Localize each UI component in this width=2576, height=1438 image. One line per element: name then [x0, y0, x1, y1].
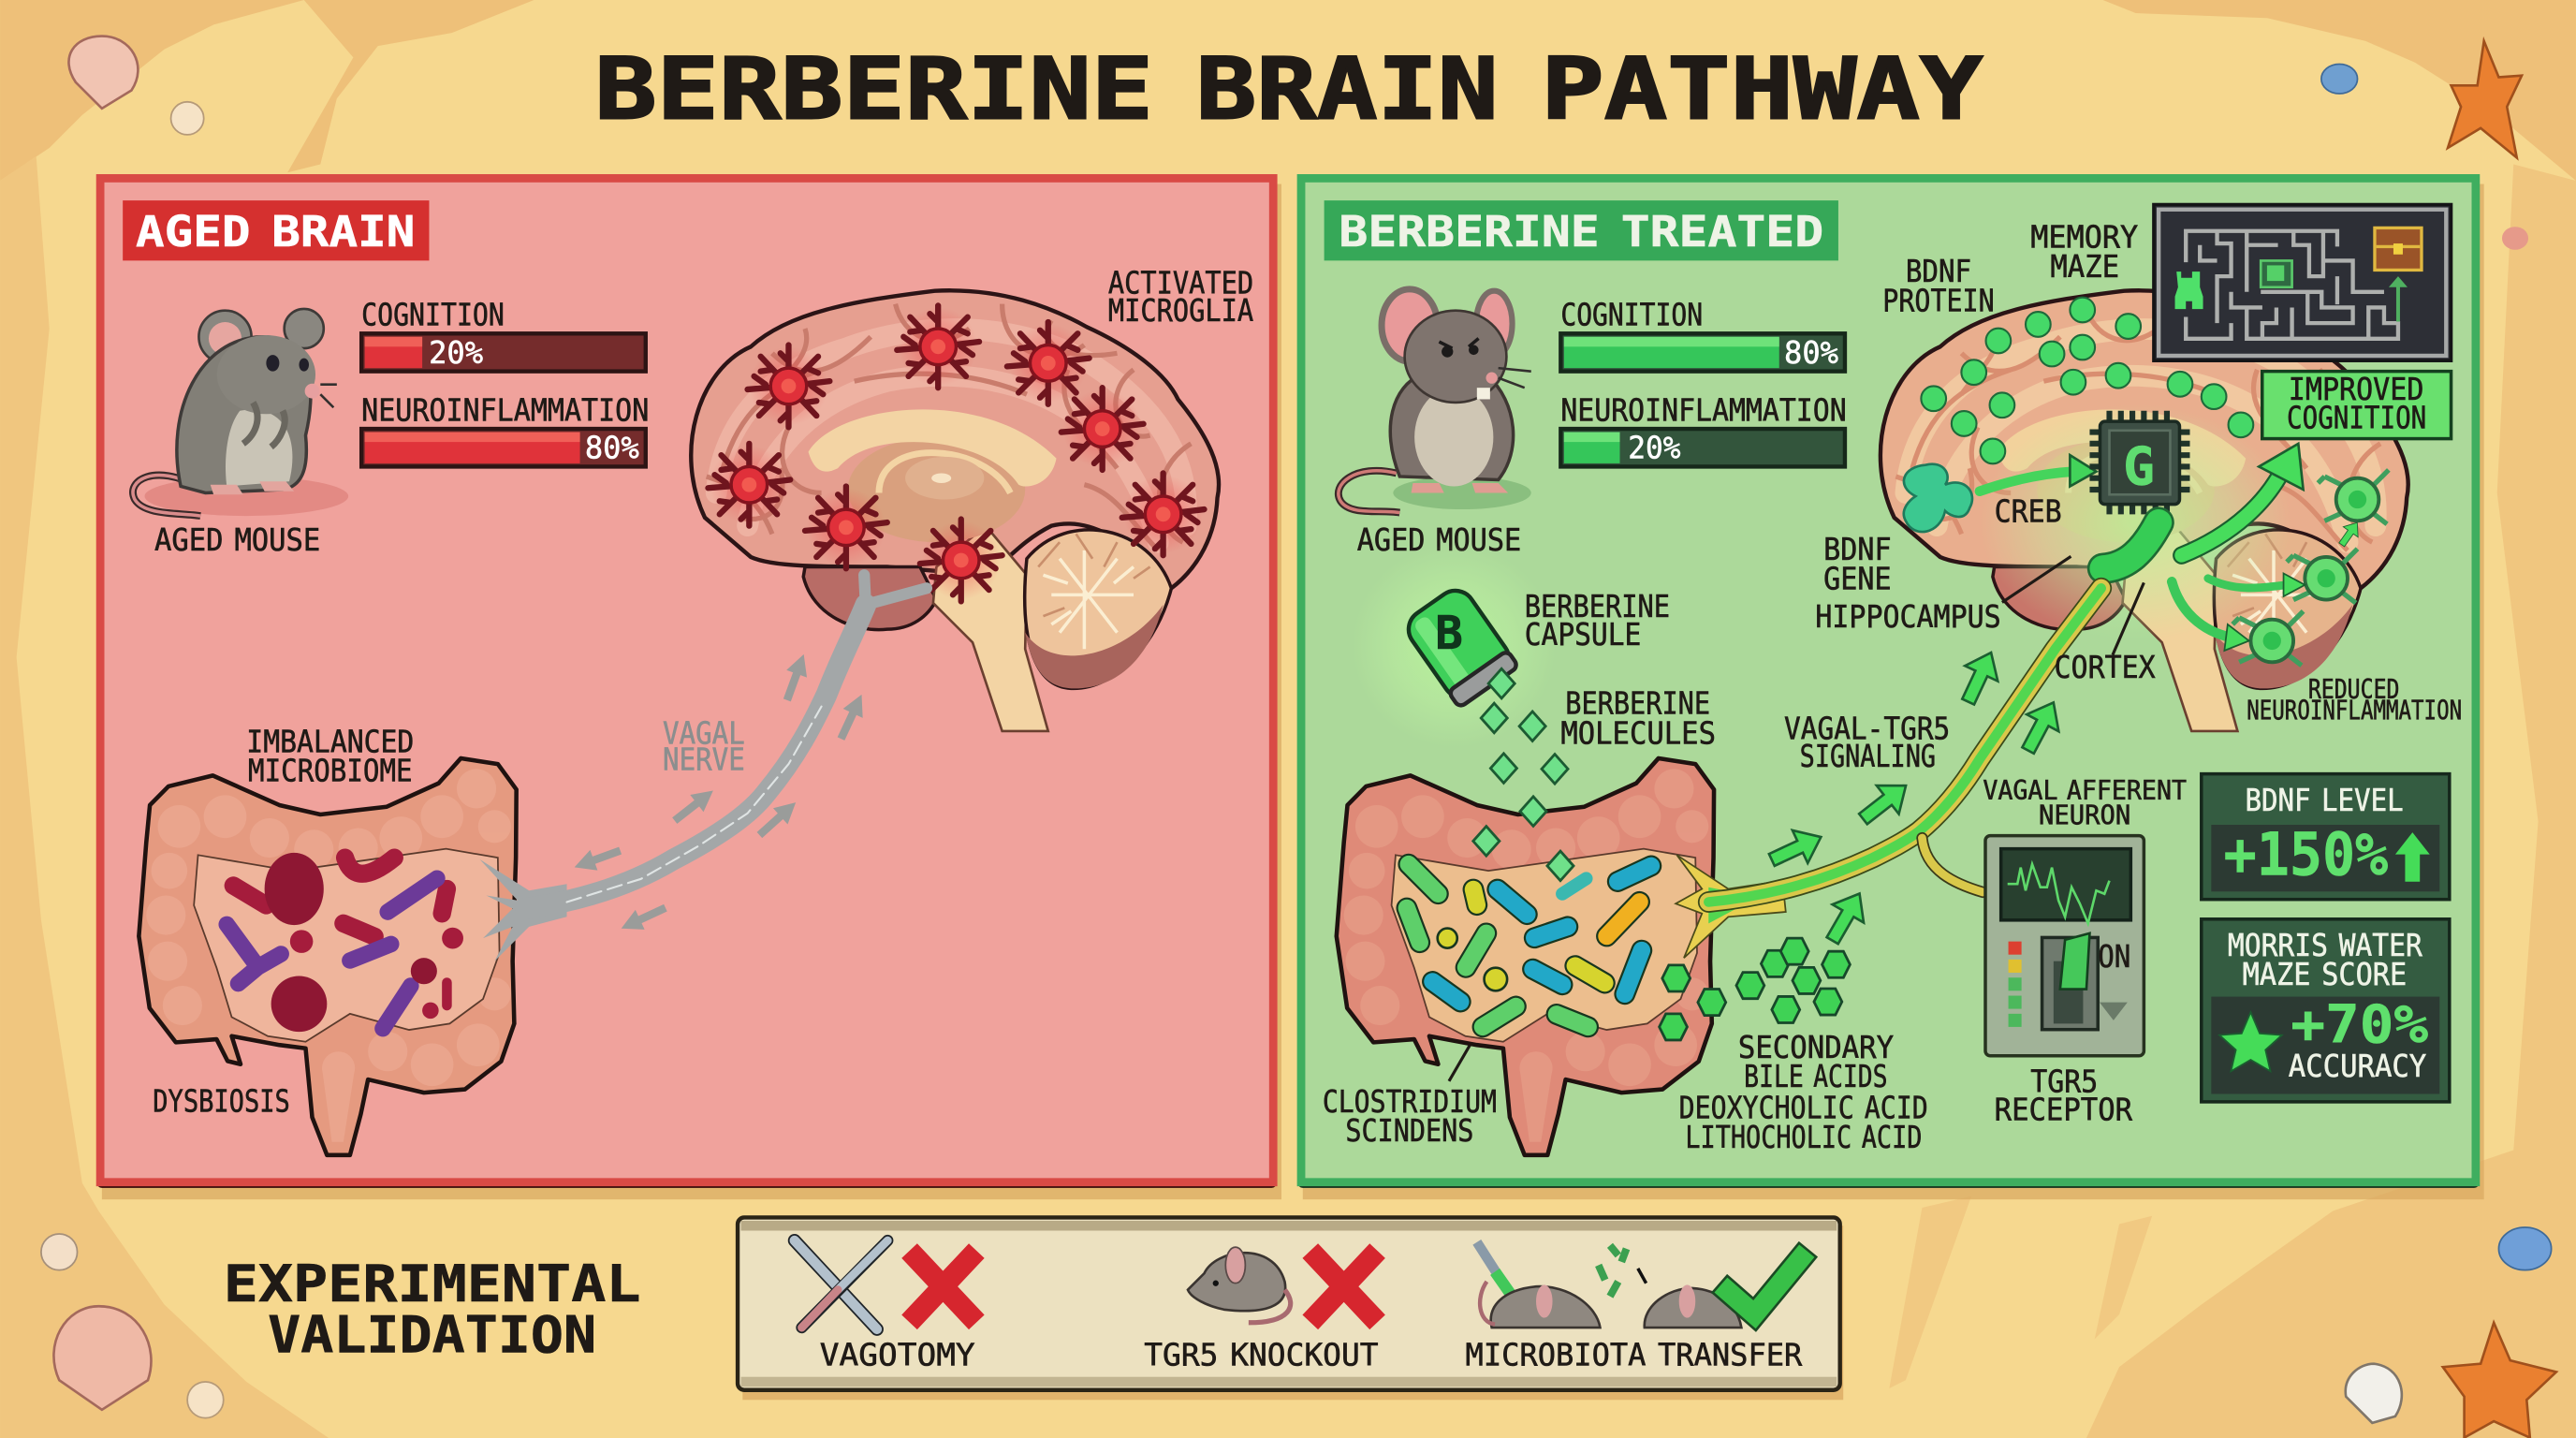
berberine molecules [1473, 668, 1573, 881]
labels: treated pathway: BDNF [1823, 531, 1892, 567]
bar: cognition 20%: COGNITION [361, 296, 505, 332]
labels: treated pathway: CORTEX [2055, 649, 2156, 685]
arrow: to improved cognition [2182, 444, 2304, 555]
bar: cognition 80% [1560, 296, 1845, 372]
icon: vagotomy scissors [795, 1240, 887, 1329]
label: tgr5 knockout: TGR5 KNOCKOUT [1144, 1336, 1379, 1372]
icon: knockout mouse [1188, 1247, 1291, 1323]
labels: treated pathway: BDNF [1906, 253, 1971, 289]
labels: treated pathway: BERBERINE [1525, 588, 1670, 624]
labels: treated pathway: RECEPTOR [1995, 1092, 2133, 1128]
labels: treated pathway: MOLECULES [1560, 714, 1716, 751]
secondary bile acids [1660, 938, 1850, 1040]
labels: treated pathway: GENE [1823, 560, 1892, 596]
labels: treated pathway: DEOXYCHOLIC ACID [1679, 1089, 1928, 1125]
hippocampus [2102, 522, 2159, 568]
title [594, 38, 1983, 139]
bar: neuroinflammation 80%: 80% [585, 430, 639, 466]
pathogenic bacteria [227, 853, 463, 1032]
labels: treated pathway: TGR5 [2030, 1063, 2098, 1099]
bar: cognition 20% [361, 296, 646, 372]
labels: treated pathway: NEURON [2039, 800, 2130, 831]
label: activated microglia [1108, 264, 1253, 329]
heading: experimental validation: EXPERIMENTAL [224, 1255, 641, 1313]
label: vagal nerve: NERVE [663, 741, 745, 777]
labels: treated pathway: SCINDENS [1345, 1112, 1473, 1149]
labels: treated pathway: LITHOCHOLIC ACID [1685, 1119, 1922, 1155]
labels: treated pathway: HIPPOCAMPUS [1815, 598, 2001, 635]
labels: treated pathway: VAGAL-TGR5 [1784, 710, 1950, 746]
vagal nerve [480, 575, 927, 961]
label: vagal nerve [663, 714, 745, 777]
brain: aged, inflamed [691, 290, 1219, 731]
berberine capsule [1352, 544, 1556, 748]
title: PATHWAY [1541, 38, 1983, 139]
labels: treated pathway: SIGNALING [1800, 738, 1936, 774]
stat: morris water maze score: MAZE SCORE [2243, 956, 2407, 992]
heading: berberine treated: BERBERINE TREATED [1339, 207, 1823, 257]
brain: treated [1881, 290, 2408, 731]
labels: treated pathway: MAZE [2050, 248, 2119, 285]
stat: morris water maze score: +70% [2291, 995, 2428, 1056]
icon: healthy mouse [1339, 289, 1531, 513]
gut: healthy microbiome [1337, 758, 1714, 1155]
stat: morris water maze score [2202, 919, 2450, 1102]
glow: around hippocampus [1980, 404, 2291, 640]
arrow: to microglia [2172, 518, 2364, 651]
arrow: creb to gene [1980, 472, 2073, 492]
beneficial bacteria [1407, 864, 1651, 1027]
bar: cognition 80%: 80% [1784, 334, 1838, 371]
stat: bdnf level: +150% [2224, 820, 2388, 889]
label: imbalanced microbiome [246, 723, 414, 788]
heading: berberine treated [1325, 200, 1838, 260]
icon: aged mouse [133, 309, 348, 516]
bar: neuroinflammation 20%: NEUROINFLAMMATION [1560, 391, 1847, 428]
stat: bdnf level: BDNF LEVEL [2245, 782, 2404, 818]
stat: morris water maze score: MORRIS WATER [2228, 927, 2423, 963]
callout: improved cognition: IMPROVED [2289, 371, 2423, 407]
labels: treated pathway: CREB [1995, 493, 2062, 530]
label: aged mouse: AGED MOUSE [154, 521, 320, 558]
labels: treated pathway [1323, 218, 2462, 1155]
label: aged mouse: AGED MOUSE [1357, 521, 1521, 558]
device: tgr5 receptor [1985, 836, 2144, 1056]
bdnf protein molecules [1921, 298, 2253, 463]
arrows: vagal-tgr5 signaling [1764, 645, 2070, 949]
label: imbalanced microbiome: MICROBIOME [248, 752, 413, 788]
heading: aged brain: AGED BRAIN [136, 207, 415, 257]
maze: memory maze [2154, 205, 2452, 360]
vagal afferent neuron [1676, 588, 2101, 958]
label: imbalanced microbiome: IMBALANCED [246, 723, 414, 759]
label: dysbiosis: DYSBIOSIS [153, 1082, 290, 1119]
bar: neuroinflammation 80%: NEUROINFLAMMATION [361, 391, 649, 428]
berberine capsule: B [1435, 606, 1463, 660]
chip: bdnf gene: G [2123, 437, 2155, 498]
labels: treated pathway: BERBERINE [1565, 685, 1710, 722]
labels: treated pathway: MEMORY [2030, 218, 2138, 255]
label lines [1449, 556, 2144, 1081]
label: microbiota transfer: MICROBIOTA TRANSFER [1466, 1336, 1803, 1372]
bar: cognition 20%: 20% [429, 334, 483, 371]
bar: cognition 80%: COGNITION [1560, 296, 1703, 332]
labels: treated pathway: BILE ACIDS [1744, 1058, 1888, 1094]
activated microglia [708, 305, 1204, 601]
heading: experimental validation [224, 1255, 641, 1364]
panel: experimental validation [738, 1217, 1843, 1400]
callout: improved cognition: COGNITION [2287, 399, 2426, 435]
panel: berberine treated [1298, 176, 2484, 1199]
arrowhead: creb to gene [2070, 455, 2096, 486]
heading: experimental validation: VALIDATION [268, 1305, 596, 1364]
chip: bdnf gene [2089, 411, 2190, 514]
title: BRAIN [1196, 38, 1499, 139]
stat: bdnf level [2202, 774, 2450, 900]
device: tgr5 receptor: ON [2098, 938, 2130, 975]
title: BERBERINE [594, 38, 1153, 139]
calmed microglia [2232, 470, 2389, 666]
arrows: vagal signal [571, 651, 871, 938]
labels: treated pathway: PROTEIN [1882, 282, 1995, 318]
label: vagal nerve: VAGAL [663, 714, 745, 751]
panel: aged brain [97, 176, 1281, 1199]
bar: neuroinflammation 80% [361, 391, 649, 466]
labels: treated pathway: SECONDARY [1738, 1029, 1894, 1065]
icon: microbiota transfer [1477, 1242, 1801, 1328]
icon: red x [916, 1258, 970, 1314]
callout: improved cognition [2262, 371, 2452, 439]
stat: morris water maze score: ACCURACY [2289, 1048, 2426, 1084]
label: activated microglia: MICROGLIA [1108, 292, 1253, 329]
bar: neuroinflammation 20% [1560, 391, 1847, 466]
creb protein [1904, 464, 1972, 532]
bar: neuroinflammation 20%: 20% [1628, 430, 1680, 466]
label: activated microglia: ACTIVATED [1108, 264, 1253, 301]
labels: treated pathway: CLOSTRIDIUM [1323, 1083, 1497, 1120]
labels: treated pathway: CAPSULE [1525, 616, 1641, 653]
labels: treated pathway: NEUROINFLAMMATION [2247, 695, 2462, 726]
icon: red x [1318, 1258, 1370, 1314]
heading: aged brain [123, 200, 429, 260]
label: vagotomy: VAGOTOMY [820, 1336, 975, 1372]
gut: imbalanced microbiome [139, 758, 517, 1155]
labels: treated pathway: VAGAL AFFERENT [1983, 775, 2187, 806]
labels: treated pathway: REDUCED [2308, 674, 2399, 705]
